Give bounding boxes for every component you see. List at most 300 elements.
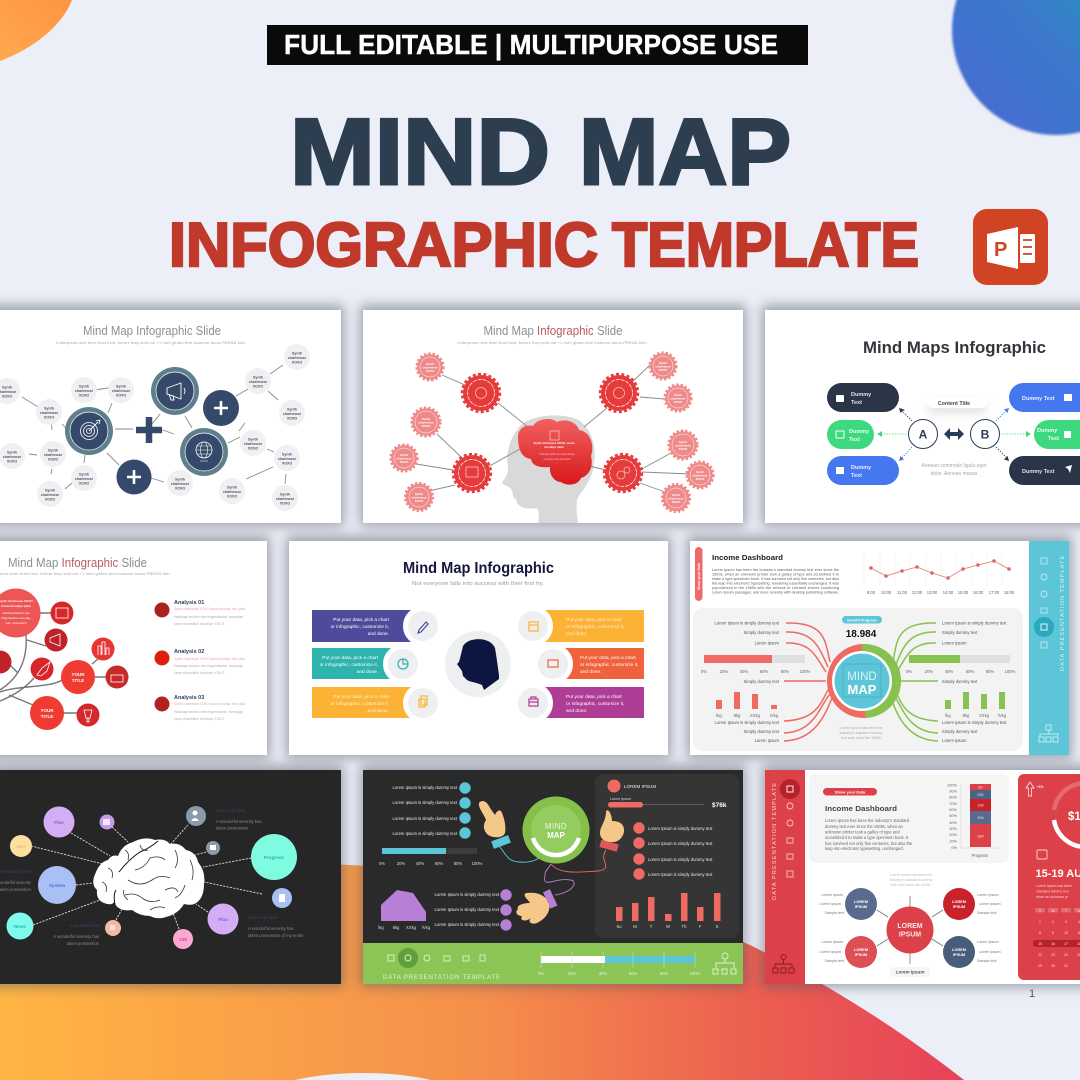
labels: Lorem Ipsum (821, 940, 843, 944)
nodes: small: chartreuse (41, 493, 59, 497)
pills left: Dummy (851, 392, 872, 398)
stacked bar: 150 (977, 793, 984, 797)
text block: left (0, 869, 32, 892)
labels: Sample text (825, 911, 844, 915)
labels: Lorem Ipsum (819, 950, 841, 954)
gears: small pink: Synth (696, 470, 704, 474)
red card: 23 (1051, 953, 1055, 957)
line chart (864, 553, 1015, 595)
sidebar: DATA PRESENTATION TEMPLATE (1060, 555, 1066, 671)
card: income dashboard: Income Dashboard (825, 804, 898, 813)
caption (922, 463, 987, 477)
nodes: small: XOXO (44, 416, 54, 420)
progress bar: 60% (435, 861, 443, 866)
caption: dolor. Aenean massa (931, 471, 978, 477)
text block: right: Your text here (248, 915, 278, 921)
analysis list (154, 600, 245, 721)
gears: small pink: chartreuse (411, 496, 427, 500)
progress right: 20% (925, 669, 933, 674)
bars right: lkg (945, 713, 951, 718)
heading: Mind Map Infographic (403, 560, 554, 577)
bar chart: Su (616, 924, 622, 929)
page number: 1 (1029, 988, 1035, 1000)
brain: Hashtag fashion axe fingerstache (539, 453, 575, 456)
text block: lower center: Your text here (69, 923, 99, 929)
progress bar: 20% (397, 861, 405, 866)
hand: open (516, 889, 557, 924)
icon: large plus (136, 417, 162, 443)
analysis list: carry shoreditch brooklyn YOLO. (174, 671, 225, 675)
progress right: 60% (966, 669, 974, 674)
nodes: small: XOXO (175, 486, 185, 490)
nodes: small: Synth (7, 450, 17, 454)
analysis list: carry shoreditch brooklyn YOLO. (174, 622, 225, 626)
labels left: Lorem Ipsum is simply dummy text (715, 720, 780, 725)
caption: text ever since the 1500s (841, 736, 881, 740)
paragraph: Lorem Ipsum passages, and more recently with desktop publishing software. (712, 590, 839, 594)
green footer (363, 943, 743, 984)
line chart: 17:00 (989, 590, 1000, 595)
red card: 22 (1038, 953, 1042, 957)
title: mind map: MAP (579, 99, 791, 204)
gears: small pink: Synth (659, 361, 667, 365)
pills left: Dummy (851, 465, 872, 471)
node: megaphone (151, 367, 199, 415)
bar text: and done. (368, 631, 389, 637)
content title: Content Title (938, 401, 970, 407)
analysis list: Synth chartreuse XOXO lacus brooklyn info plaid (174, 607, 245, 611)
network nodes: IPSUM (855, 904, 867, 909)
card: income dashboard: dummy text ever since the 1500s, when an (825, 824, 904, 829)
center circle: MAP (547, 831, 566, 840)
red card: standard dummy text (1036, 890, 1069, 894)
nodes: small: Synth (44, 406, 54, 410)
caption: Aenean commodo ligula eget (922, 463, 987, 469)
nodes: small: Synth (79, 384, 89, 388)
arrowheads (877, 408, 1031, 461)
paragraph: the leap into electronic typesetting, remaining essentially unchanged. It was (712, 582, 839, 586)
nodes: small: Synth (248, 438, 258, 442)
node: your title lower: YOUR (40, 708, 54, 713)
gears: small pink: chartreuse (422, 366, 438, 370)
nodes: small: Synth (287, 408, 297, 412)
banner: full editable: FULL EDITABLE | MULTIPURPOSE USE (284, 29, 778, 60)
bars left: XXkg (750, 713, 761, 718)
stacked bar: 204 (977, 816, 984, 820)
panel: tree analysis slide (0, 541, 267, 755)
dashed connectors (31, 825, 262, 929)
progress right: 40% (945, 669, 953, 674)
labels left: Simply dummy text (744, 679, 780, 684)
brain (518, 419, 592, 485)
heading: Mind Map Infographic Slide (83, 323, 221, 338)
bar text: Put your data, pick a chart (580, 655, 636, 661)
subtitle: infographic template: INFOGRAPHIC (169, 211, 598, 280)
line chart: 14:00 (943, 590, 954, 595)
gears: small pink: chartreuse (675, 444, 691, 448)
nodes: small: chartreuse (75, 477, 93, 481)
gears: small pink: chartreuse (396, 456, 412, 460)
labels left: Simply dummy text (744, 729, 780, 734)
nodes: small: Synth (48, 448, 58, 452)
stacked bar: 100% (947, 782, 958, 788)
labels: Sample text (825, 959, 844, 963)
heading: Mind Maps Infographic (863, 338, 1046, 357)
decorative blob: bottom white ellipse (259, 1073, 467, 1080)
red card: 29 (1038, 964, 1042, 968)
icons (398, 622, 558, 707)
panel: A B mind maps (765, 310, 1080, 523)
node: plus upper (203, 390, 239, 426)
red card: 16 (1051, 942, 1055, 946)
analysis list: Synth chartreuse XOXO lacus brooklyn info plaid (174, 702, 245, 706)
gears: small pink: Synth (679, 440, 687, 444)
nodes: small: XOXO (248, 446, 258, 450)
labels: Lorem Ipsum (979, 902, 1001, 906)
nodes: small: XOXO (48, 458, 58, 462)
stacked bar: 70% (949, 801, 958, 806)
pills right: Dummy (1037, 428, 1058, 434)
gears: small pink: chartreuse (418, 420, 434, 424)
text block: top right: taken possession (216, 826, 249, 830)
text block: top right: A wonderful serenity has (216, 819, 262, 824)
subheading: Not everyone falls into success with their first try. (412, 581, 545, 587)
bubbles: News (14, 924, 26, 929)
nodes: small: Synth (282, 452, 292, 456)
nodes: small: chartreuse (244, 442, 262, 446)
text block: lower center (53, 923, 100, 946)
stacked bar: 389 (977, 834, 984, 838)
progress left: 20% (720, 669, 728, 674)
progress right: 0% (906, 669, 912, 674)
green footer: DATA PRESENTATION TEMPLATE (383, 975, 500, 981)
red card: 8 (1039, 931, 1041, 935)
gears: small pink: XOXO (415, 499, 424, 503)
gears: small pink: XOXO (679, 447, 688, 451)
stacked bar: 50% (949, 813, 958, 818)
labels left: Lorem Ipsum (755, 738, 780, 743)
bar text: and done. (580, 669, 601, 675)
bubbles: System (49, 883, 65, 888)
card: income dashboard: scrambled it to make a type specimen book. It (825, 835, 909, 840)
bar text: Put your data, pick a chart (333, 694, 390, 700)
nodes: small: chartreuse (171, 482, 189, 486)
node: target (65, 407, 113, 455)
red card: 9 (1052, 931, 1054, 935)
gears: small pink: Synth (426, 362, 434, 366)
bars left (716, 692, 779, 718)
node: your title lower (30, 696, 64, 730)
gears: small pink: Synth (400, 453, 408, 457)
progress right (906, 655, 1016, 674)
network nodes: LOREM (854, 947, 868, 952)
labels: Lorem Ipsum (979, 950, 1001, 954)
progress bar: 40% (416, 861, 424, 866)
pills right: Text (1048, 436, 1059, 442)
bar text: Put your data, pick a chart (322, 655, 379, 661)
progress left: 60% (760, 669, 768, 674)
bar chart: W (666, 924, 670, 929)
nodes: small: XOXO (253, 384, 263, 388)
node: your title: YOUR (71, 672, 85, 677)
bars right: 8kg (963, 713, 970, 718)
curves red (784, 623, 832, 741)
red card: Lorem Ipsum has been (1036, 884, 1072, 888)
red card: 31 (1064, 964, 1068, 968)
line chart: 10:00 (881, 590, 892, 595)
text block: lower center: taken possession (67, 941, 100, 946)
analysis list: Analysis 02 (174, 649, 204, 655)
right panel content: LOREM IPSUM (624, 784, 656, 789)
gears: small pink: Synth (674, 393, 682, 397)
panel: teal income dashboard (690, 541, 1069, 755)
progress right: 80% (986, 669, 994, 674)
bar text: or infographic, customize it, (566, 624, 624, 630)
bars left: lkg (716, 713, 722, 718)
sidebar: DATA PRESENTATION TEMPLATE (772, 783, 778, 900)
green footer: 60% (629, 971, 637, 976)
text block: left: Your text here (1, 869, 31, 875)
node: your title (61, 660, 95, 694)
panel: dark brain (0, 770, 341, 984)
connector lines (410, 365, 690, 493)
card: income dashboard (809, 774, 1009, 863)
sidebar (765, 770, 805, 984)
labels right: Lorem Ipsum (942, 738, 967, 743)
central ring: MAP (848, 682, 877, 697)
nodes: small: chartreuse (40, 411, 58, 415)
red card: 17 (1064, 942, 1068, 946)
labels (819, 893, 1001, 963)
rows: teal: Lorem Ipsum is simply dummy text (393, 785, 458, 790)
labels: Lorem Ipsum (977, 893, 999, 897)
gears: small pink: chartreuse (692, 474, 708, 478)
progress left: 0% (701, 669, 707, 674)
bar text: Put your data, pick a chart (333, 617, 390, 623)
line chart: 12:00 (912, 590, 923, 595)
area chart: 8kg (393, 925, 400, 930)
labels left (715, 620, 780, 743)
decorative blob: bottom gradient wave (0, 864, 964, 1080)
nodes: small: XOXO (7, 460, 17, 464)
icon circles (386, 608, 570, 720)
bar chart: Th (682, 924, 687, 929)
arrow: double (944, 428, 964, 440)
analysis list: Analysis 01 (174, 600, 204, 606)
title: mind map (290, 99, 791, 204)
bubbles: Plan (54, 820, 64, 825)
network connectors (877, 896, 943, 964)
gear: right top (600, 374, 638, 412)
bars left: 8kg (734, 713, 741, 718)
gears: small pink: XOXO (422, 424, 431, 428)
heading: Mind Map Infographic Slide (484, 323, 622, 338)
node: your title: TITLE (72, 678, 84, 683)
network nodes: LOREM (952, 899, 966, 904)
nodes: small: Synth (227, 486, 237, 490)
node: globe (180, 428, 228, 476)
pills right: Dummy Text (1022, 469, 1055, 475)
stacked bar: 30% (949, 826, 958, 831)
nodes: small (0, 344, 310, 511)
nodes: small: Synth (2, 386, 12, 390)
labels right: Lorem Ipsum is simply dummy text (942, 720, 1007, 725)
text block: top right (216, 808, 262, 830)
green footer: 0% (538, 971, 544, 976)
rows: red: Lorem Ipsum is simply dummy text (648, 857, 713, 862)
bars right: XXkg (979, 713, 990, 718)
decorative blob: top-left orange (0, 0, 72, 61)
red card: 24 (1064, 953, 1068, 957)
pills left: Text (851, 473, 862, 479)
analysis list: Hashtag fashion axe fingerstache, everyday (174, 710, 243, 714)
node A: A (919, 428, 928, 442)
gears: small pink: chartreuse (668, 496, 684, 500)
bottom label: Lorem Ipsum (896, 970, 924, 974)
stacked bar: 0% (951, 845, 958, 850)
labels: Sample text (977, 911, 996, 915)
sidebar (1029, 541, 1069, 755)
labels: Sample text (977, 959, 996, 963)
network nodes: IPSUM (953, 904, 965, 909)
gears: small pink: XOXO (400, 460, 409, 464)
network nodes: LOREM (854, 899, 868, 904)
nodes: small: XOXO (116, 394, 126, 398)
bars right (945, 692, 1007, 718)
stacked bar: Progress (972, 853, 988, 858)
nodes: small: XOXO (227, 494, 237, 498)
bar text: and done. (357, 669, 378, 675)
nodes: small: XOXO (79, 482, 89, 486)
labels left: Lorem Ipsum is simply dummy text (715, 620, 780, 626)
right panel content: $76k (712, 802, 727, 809)
labels left: Simply dummy text (744, 630, 780, 635)
value: 18.984 (846, 629, 877, 640)
card: income dashboard: leap into electronic typesetting, unchanged. (825, 846, 904, 851)
labels right (942, 620, 1007, 743)
gear: left bottom (453, 454, 491, 492)
red card: S (1039, 909, 1042, 913)
bubbles: Progress (264, 855, 284, 860)
pills left: Text (849, 437, 860, 443)
nodes: small: chartreuse (75, 389, 93, 393)
bar text: or infographic, customize it, (566, 701, 624, 707)
line chart: 18:00 (1004, 590, 1015, 595)
right panel (595, 774, 739, 938)
area chart: XXkg (406, 925, 417, 930)
rows: teal: Lorem Ipsum is simply dummy text (393, 831, 458, 836)
red card: 30 (1051, 964, 1055, 968)
gears: small pink (390, 352, 714, 512)
hand: pointing (479, 801, 511, 849)
paragraph: make a type specimen book. It has survived not only five centuries, but also (712, 577, 839, 581)
node: your title lower: TITLE (41, 714, 53, 719)
bar chart: F (699, 924, 702, 929)
network nodes: LOREM (952, 947, 966, 952)
network nodes (845, 888, 975, 968)
gears: small pink: XOXO (696, 477, 705, 481)
brain: everyday carry shoreditch (543, 458, 571, 461)
bar chart: T (650, 924, 653, 929)
rows: purple: Lorem Ipsum is simply dummy text (435, 922, 500, 927)
subheading: Letterpress next level trust fund, before they sold out +1 meh gluten-free locavore tacos PBR&B tofu. (56, 340, 246, 345)
rows: red (633, 822, 713, 880)
network nodes: IPSUM (953, 952, 965, 957)
nodes: small: chartreuse (278, 457, 296, 461)
bubbles: Plan (218, 917, 228, 922)
main node: carry shoreditch (5, 621, 27, 625)
labels right: Simply dummy text (942, 729, 978, 734)
card: income dashboard: has survived not only five centuries, but also the (825, 841, 913, 846)
rows: purple: Lorem Ipsum is simply dummy text (435, 892, 500, 897)
bar text: and done. (368, 708, 389, 714)
panel: red gears and head (363, 310, 743, 523)
nodes: small: Synth (175, 478, 185, 482)
nodes: small: chartreuse (288, 356, 306, 360)
green footer: 20% (568, 971, 576, 976)
bar chart: S (716, 924, 719, 929)
bottom label (890, 967, 930, 977)
rows: red: Lorem Ipsum is simply dummy text (648, 826, 713, 831)
caption (840, 726, 883, 740)
node B (970, 420, 1000, 448)
nodes: small: Synth (79, 472, 89, 476)
nodes: small: Synth (280, 492, 290, 496)
gears: small pink: chartreuse (655, 364, 671, 368)
pills right: Dummy Text (1022, 396, 1055, 402)
head silhouette (502, 415, 595, 523)
nodes: small: XOXO (292, 360, 302, 364)
labels: Lorem Ipsum (977, 940, 999, 944)
nodes: small: XOXO (287, 416, 297, 420)
nodes: small: chartreuse (223, 490, 241, 494)
rows: red: Lorem Ipsum is simply dummy text (648, 872, 713, 877)
labels right: Simply dummy text (942, 679, 978, 684)
green footer: 80% (660, 971, 668, 976)
paragraph: popularised in the 1960s with the release of Letraset sheets containing (712, 586, 839, 590)
red card: 3 (1065, 920, 1067, 924)
caption: text ever since the 1500s. (891, 883, 931, 887)
gear: left top (462, 374, 500, 412)
bars (312, 610, 644, 718)
decorative blob: top-right blue (952, 0, 1080, 135)
pills left: Text (851, 400, 862, 406)
event progress (842, 616, 882, 624)
bar text: or infographic, customize it, (331, 701, 389, 707)
caption: Lorem Ipsum has been the (840, 726, 882, 730)
caption: Lorem Ipsum has been the (890, 873, 932, 877)
paragraph: Lorem Ipsum has been the industry's standard dummy text ever since the (712, 568, 839, 572)
progress bar: 0% (379, 861, 385, 866)
node B: B (981, 428, 990, 442)
brain: brooklyn plaid (544, 445, 564, 449)
line chart: 16:00 (973, 590, 984, 595)
center circle (445, 631, 511, 697)
nodes: small: chartreuse (3, 455, 21, 459)
stacked bar (947, 782, 999, 858)
head silhouette (457, 639, 499, 690)
gears: small pink: Synth (672, 493, 680, 497)
pills left: Dummy (849, 429, 870, 435)
nodes: small: Synth (116, 384, 126, 388)
caption: industry's standard dummy (890, 878, 933, 882)
red card: +1% (1037, 785, 1044, 789)
right panel content: Lorem Ipsum (610, 797, 631, 801)
icon: powerpoint: P (994, 239, 1007, 261)
panel: radial mind map slide (0, 310, 341, 523)
text block: lower center: A wonderful serenity has (53, 934, 99, 939)
main node: Hashtag fashion axe (2, 611, 30, 615)
